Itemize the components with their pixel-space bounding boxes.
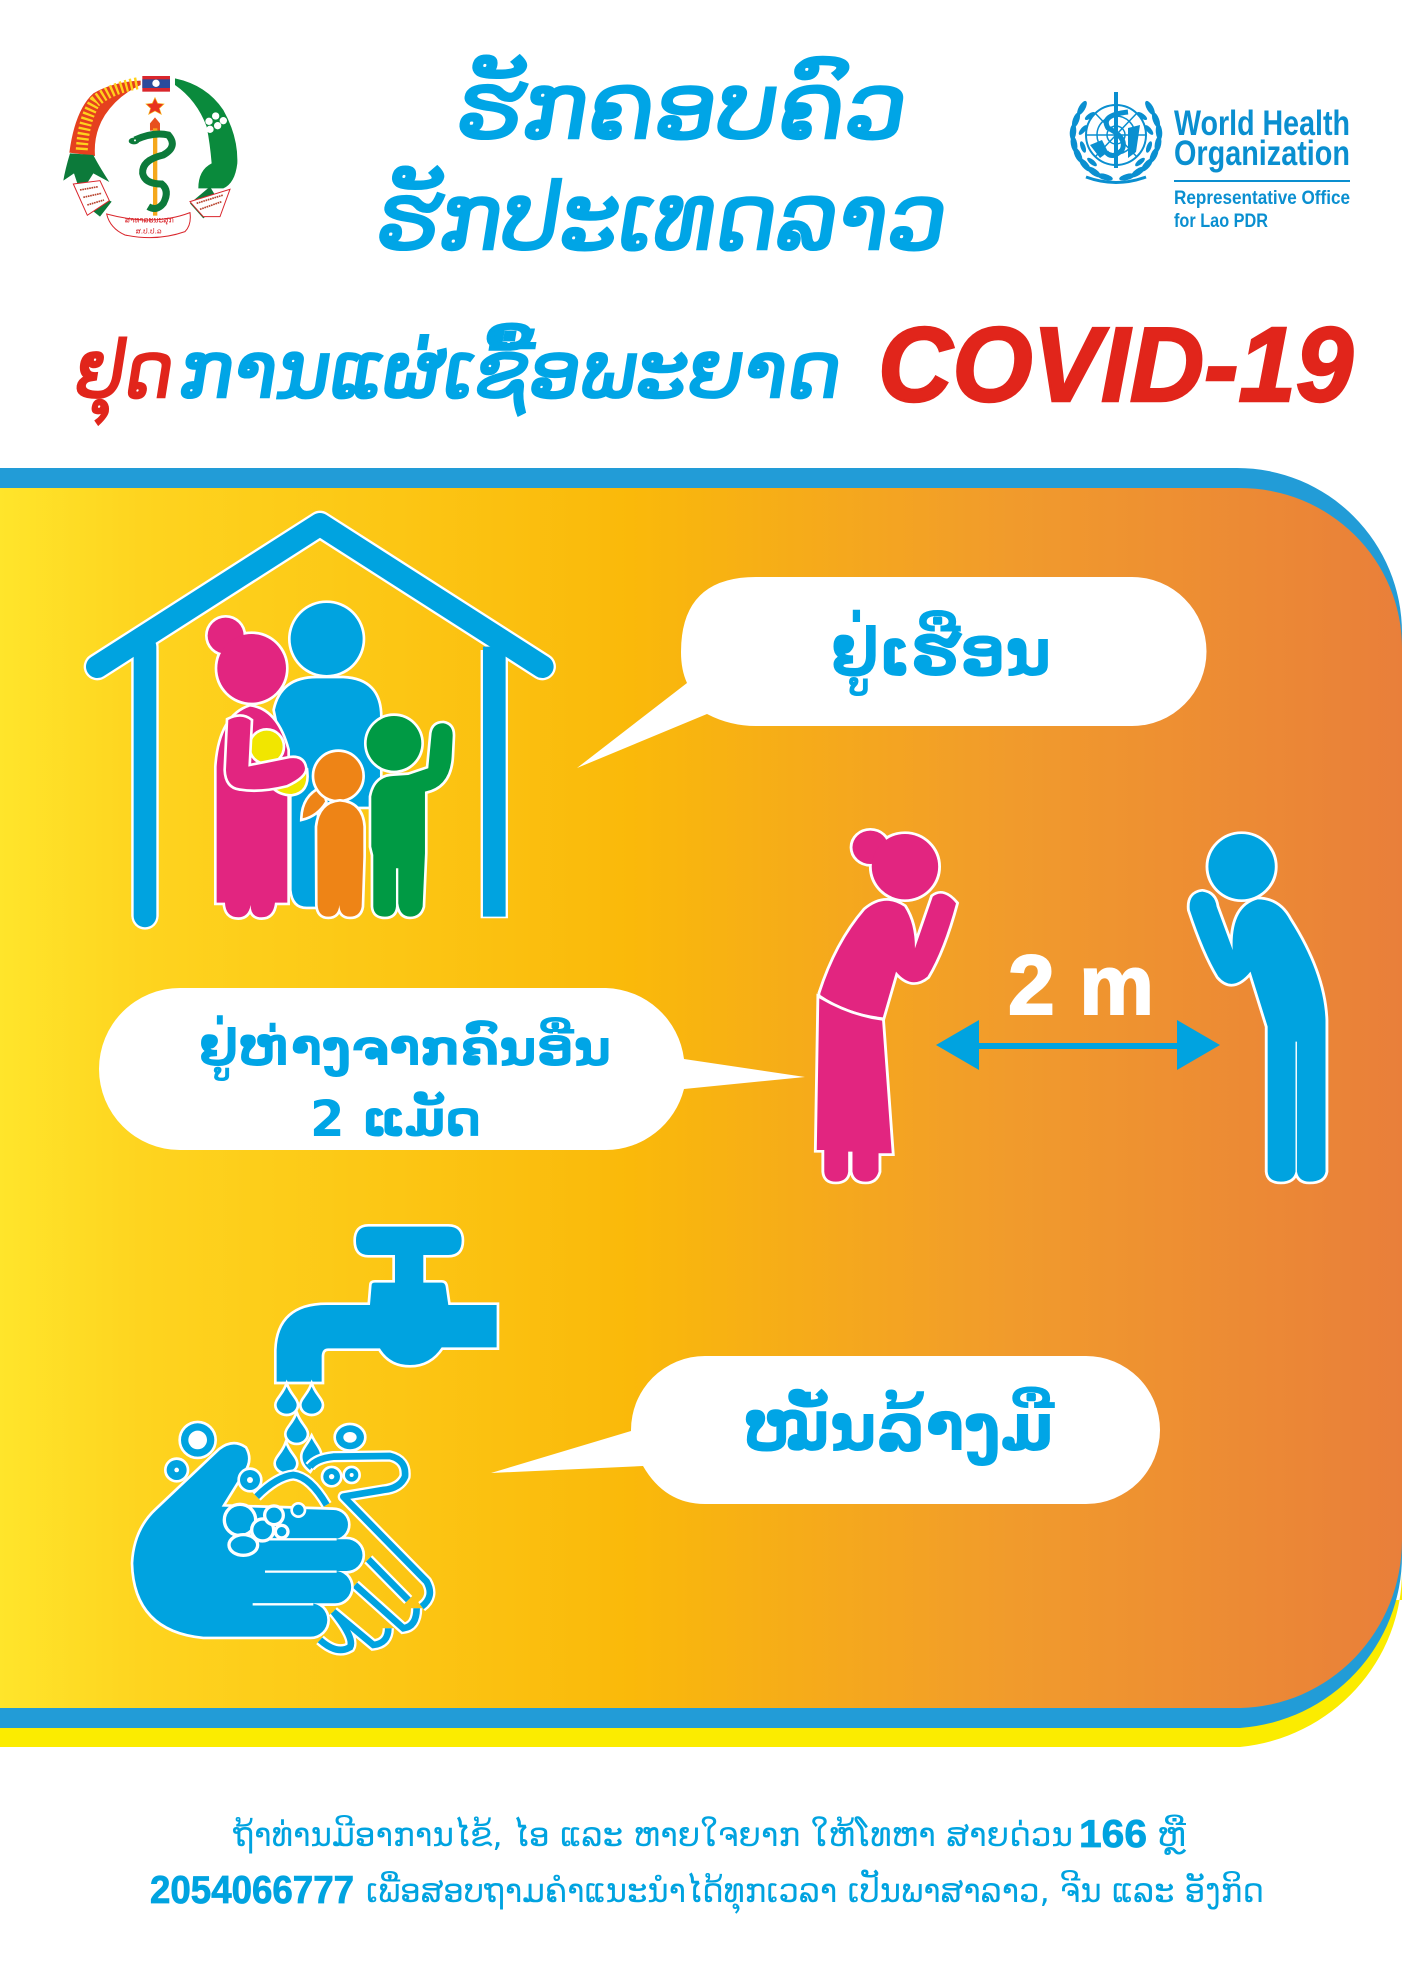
emblem ribbons	[73, 181, 230, 238]
logo: Ministry of Health emblem	[63, 76, 237, 238]
WHO name: World Health	[1174, 104, 1350, 143]
arrow: two metres double arrow	[936, 1020, 1220, 1070]
footer line 2: ເພື່ອສອບຖາມຄຳແນະນຳໄດ້ທຸກເວລາ ເປັນພາສາລາວ, ຈີນ ແລະ ອັງກິດ	[366, 1867, 1264, 1914]
house	[97, 524, 542, 918]
panel: gradient panel with blue and yellow edges	[0, 468, 1402, 1747]
callout: wash hands	[491, 1356, 1160, 1504]
girl	[303, 752, 363, 917]
WHO name: Organization	[1174, 134, 1350, 173]
soap bubbles	[167, 1423, 364, 1554]
title line 2: ຮັກປະເທດລາວ	[369, 164, 957, 271]
emblem flag	[142, 76, 170, 92]
headline blue words: ການແຜ່ເຊື້ອພະຍາດ	[173, 324, 849, 416]
headline COVID-19: COVID-19	[878, 306, 1353, 424]
footer text	[150, 1813, 1264, 1914]
callout: wash hands: ໝັ່ນລ້າງມື	[743, 1386, 1055, 1466]
logo: World Health Organization	[1069, 92, 1350, 232]
callout: keep distance 2 metres: ຢູ່ຫ່າງຈາກຄົນອື່ນ	[199, 1015, 611, 1081]
icon: man greeting	[1190, 834, 1326, 1182]
finger separators	[253, 1539, 337, 1604]
WHO office text	[1174, 188, 1350, 232]
emblem ribbons: ສາທາລະນະສຸກ	[125, 216, 174, 226]
headline red word: ຢຸດ	[68, 324, 181, 425]
footer line 2	[150, 1867, 1264, 1914]
water drops	[276, 1387, 322, 1472]
footer line 1: 166	[1079, 1813, 1147, 1856]
icon: tap and washing hands	[133, 1227, 497, 1650]
icon: family in house	[97, 524, 542, 918]
footer line 1: ຖ້າທ່ານມີອາການໄຂ້, ໄອ ແລະ ຫາຍໃຈຍາກ ໃຫ້ໂທຫາ ສາຍດ່ວນ	[232, 1814, 1073, 1854]
footer line 2: 2054066777	[150, 1869, 354, 1912]
back hand outline	[257, 1456, 430, 1650]
emblem rice sheaf	[63, 81, 141, 193]
boy	[367, 716, 453, 917]
callout: keep distance 2 metres	[99, 988, 805, 1150]
text: 2 m: 2 m	[1008, 938, 1154, 1032]
emblem ribbons: ສ.ປ.ປ.ລ	[136, 226, 162, 235]
title line 1: ຮັກຄອບຄົວ	[449, 53, 917, 160]
WHO office text: for Lao PDR	[1174, 211, 1268, 232]
headline	[68, 306, 1353, 425]
emblem star	[146, 98, 164, 114]
callout: keep distance 2 metres: 2 ແມັດ	[310, 1090, 481, 1148]
front hand	[133, 1445, 362, 1637]
WHO office text: Representative Office	[1174, 188, 1350, 209]
icon: woman greeting	[817, 831, 956, 1182]
WHO emblem	[1069, 92, 1163, 182]
emblem rod and snake	[129, 117, 172, 216]
tap	[277, 1227, 497, 1382]
father	[275, 603, 380, 907]
callout: stay home	[577, 577, 1206, 768]
mother and baby	[208, 618, 306, 917]
footer line 1: ຫຼື	[1157, 1813, 1187, 1855]
callout: stay home: ຢູ່ເຮືອນ	[831, 609, 1051, 696]
WHO name	[1174, 104, 1350, 182]
emblem green wreath	[175, 78, 237, 188]
